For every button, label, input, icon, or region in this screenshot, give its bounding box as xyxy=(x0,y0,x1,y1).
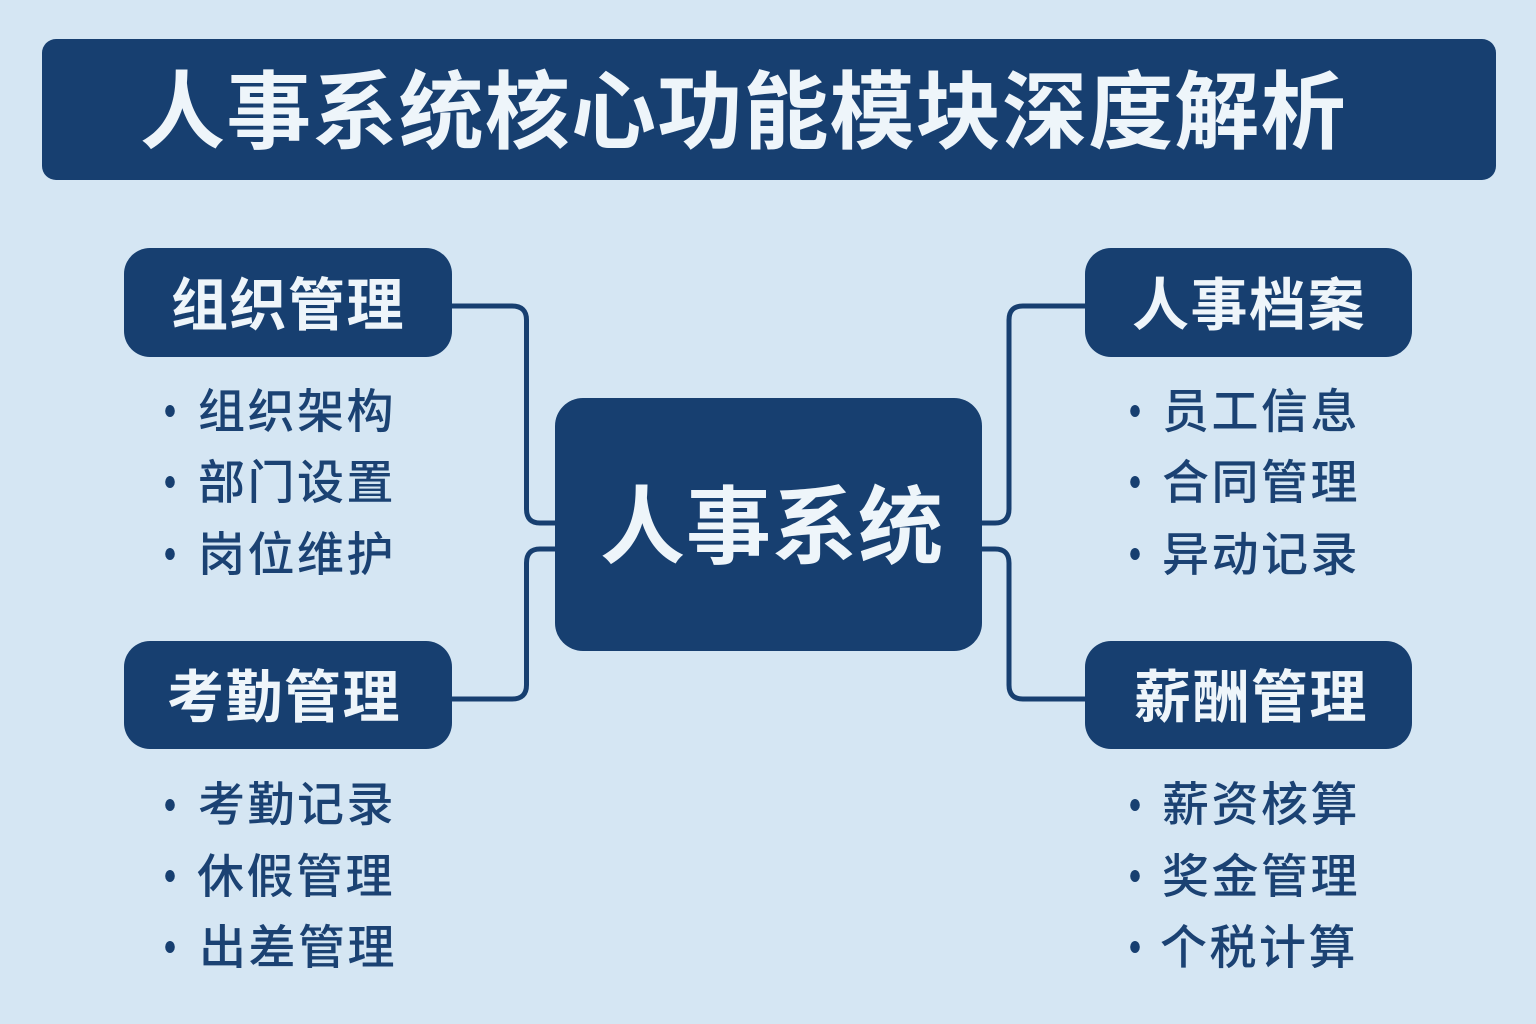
title banner: 人事系统核心功能模块深度解析 xyxy=(140,66,1347,161)
list: attendance management items xyxy=(165,778,397,974)
heading: personnel files xyxy=(1085,248,1412,357)
panel: personnel files xyxy=(1085,248,1412,581)
list: attendance management items: 休假管理 xyxy=(197,850,395,903)
heading: organisation management: 组织管理 xyxy=(171,274,405,338)
panel: organisation management xyxy=(124,248,452,581)
heading: payroll management xyxy=(1085,641,1412,749)
connector: center to payroll management xyxy=(981,549,1085,699)
connector: center to personnel files xyxy=(981,306,1085,523)
list: attendance management items: 考勤记录 xyxy=(198,778,396,831)
central node xyxy=(555,398,982,651)
list: personnel files items xyxy=(1130,385,1360,581)
title banner xyxy=(42,39,1496,180)
heading: personnel files: 人事档案 xyxy=(1132,274,1366,338)
list: personnel files items: 合同管理 xyxy=(1162,456,1360,509)
list: personnel files items: 异动记录 xyxy=(1162,528,1360,581)
list: payroll management items xyxy=(1130,778,1360,974)
list: payroll management items: 薪资核算 xyxy=(1162,778,1360,831)
connector: center to attendance management xyxy=(452,549,556,699)
connector: center to organisation management xyxy=(452,306,556,523)
panel: payroll management xyxy=(1085,641,1412,974)
central node: 人事系统 xyxy=(600,481,944,576)
panel: attendance management xyxy=(124,641,452,974)
heading: attendance management xyxy=(124,641,452,749)
list: organisation management items: 组织架构 xyxy=(198,385,396,438)
list: organisation management items xyxy=(165,385,396,581)
heading: organisation management xyxy=(124,248,452,357)
list: attendance management items: 出差管理 xyxy=(199,921,397,974)
heading: payroll management: 薪酬管理 xyxy=(1134,666,1368,730)
list: payroll management items: 个税计算 xyxy=(1160,921,1358,974)
list: organisation management items: 部门设置 xyxy=(198,456,396,509)
list: payroll management items: 奖金管理 xyxy=(1162,850,1360,903)
list: organisation management items: 岗位维护 xyxy=(198,528,396,581)
list: personnel files items: 员工信息 xyxy=(1162,385,1360,438)
heading: attendance management: 考勤管理 xyxy=(167,666,401,730)
